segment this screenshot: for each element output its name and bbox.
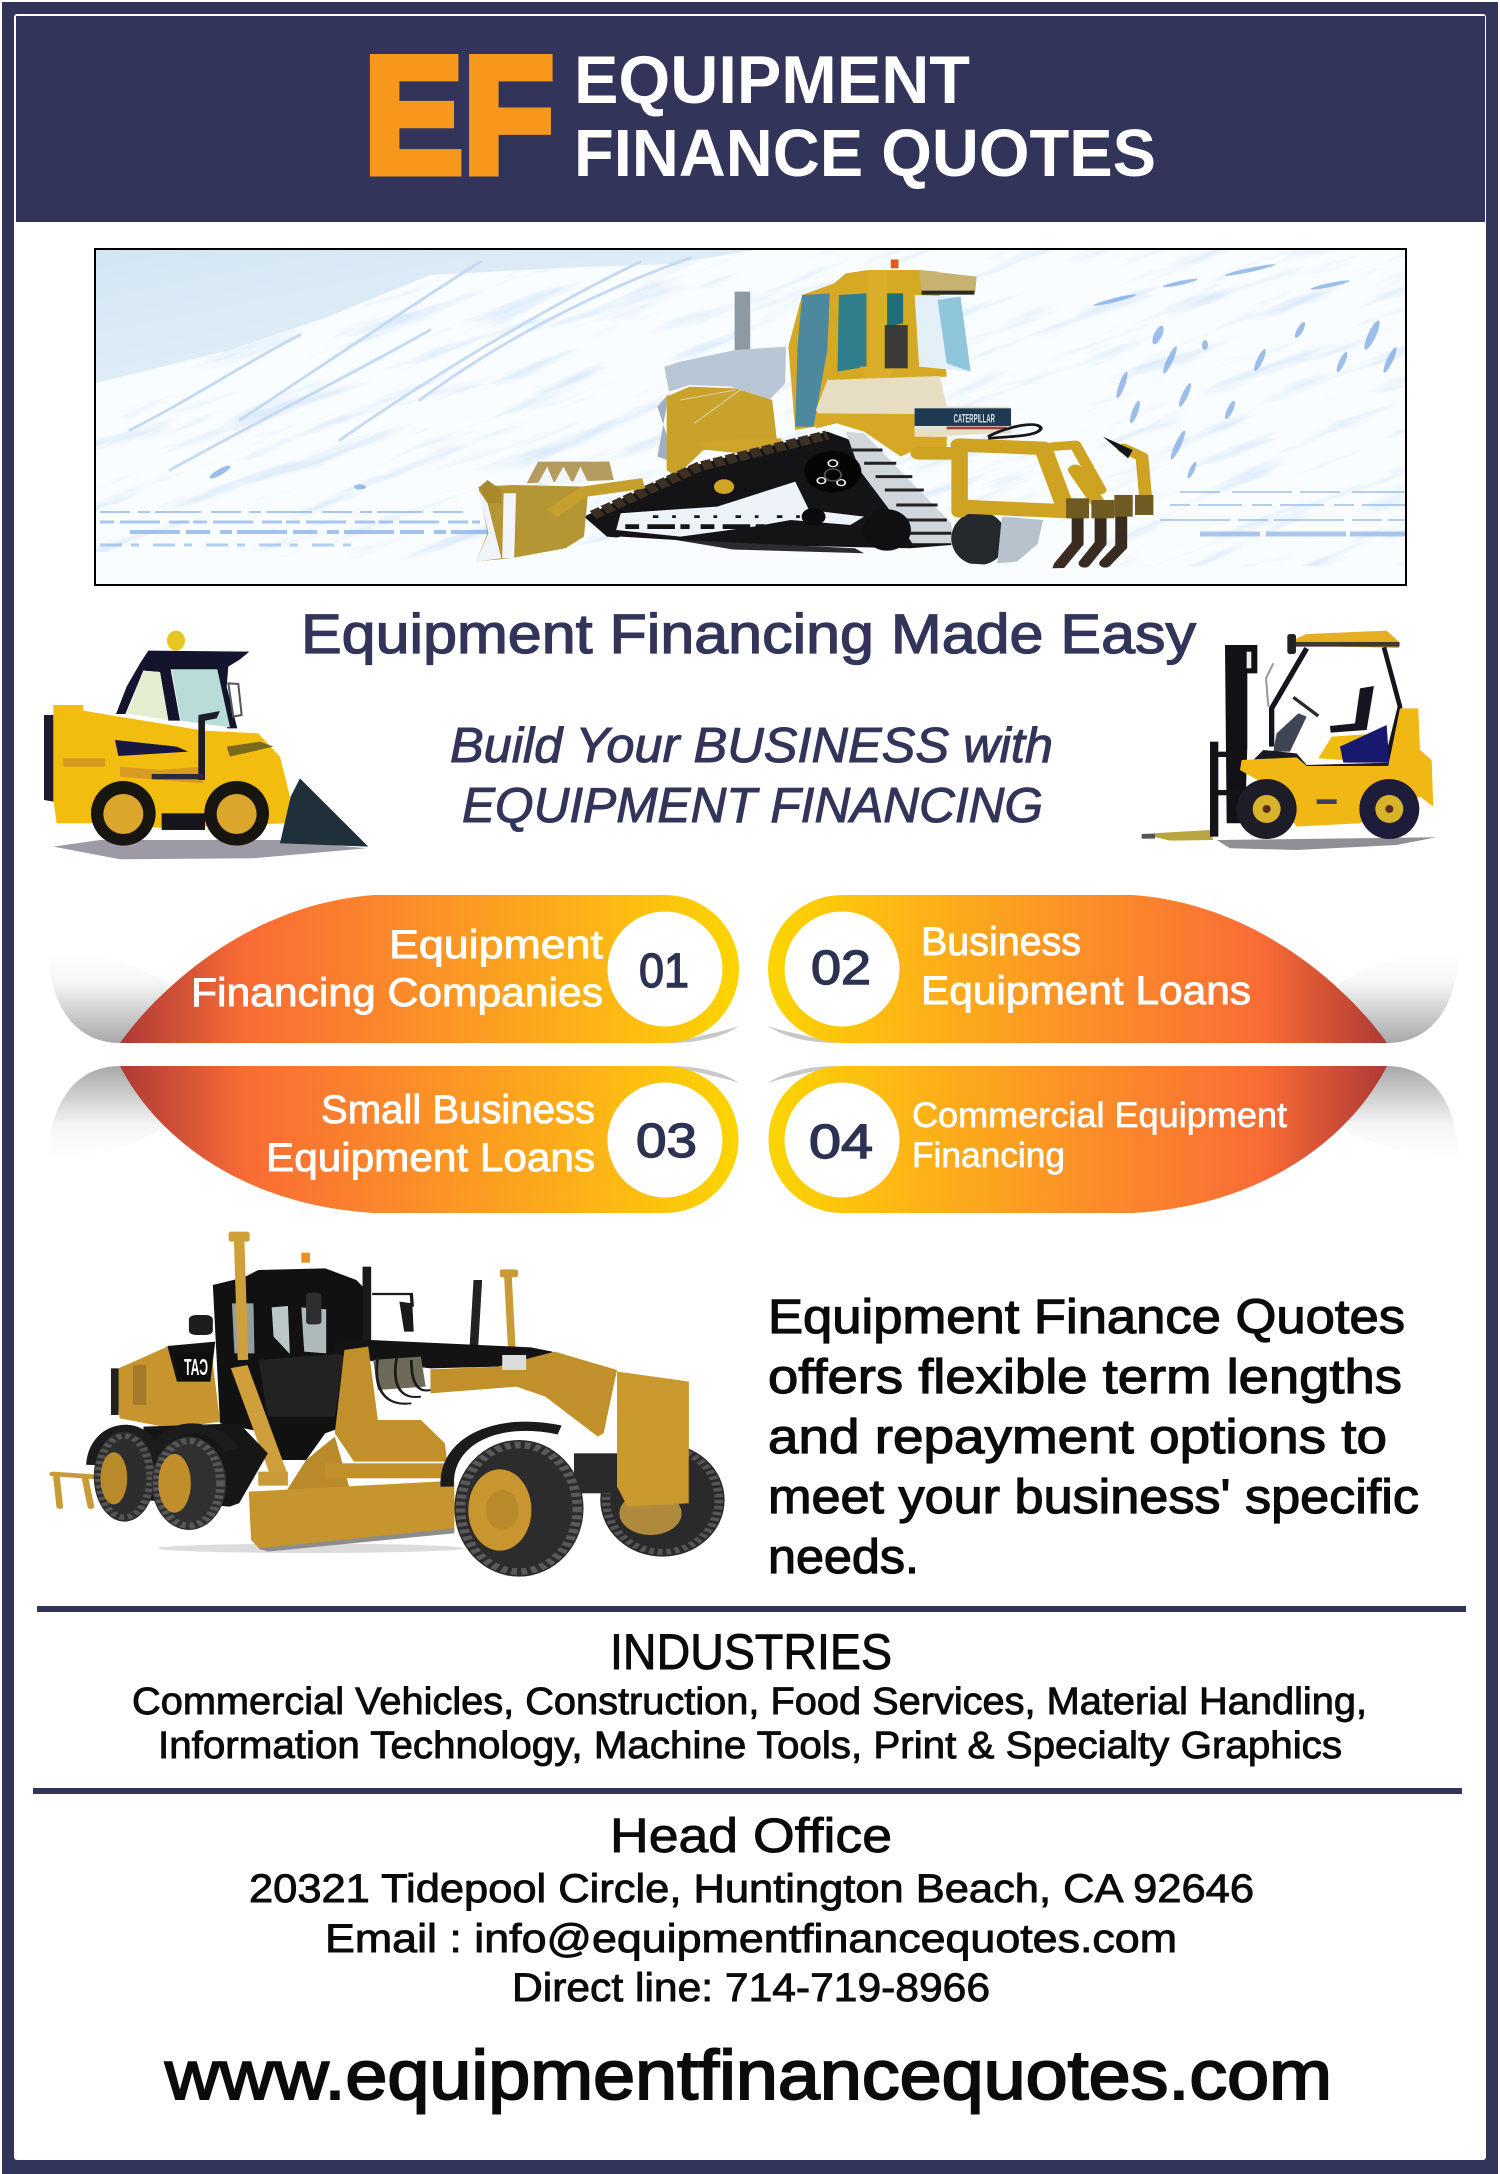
industries block: INDUSTRIES xyxy=(610,1624,892,1680)
icon: skid steer loader xyxy=(44,631,368,859)
icon: motor grader xyxy=(53,1232,725,1577)
badge 03 xyxy=(608,1082,722,1198)
logo wordmark: EQUIPMENT xyxy=(574,42,970,118)
logo wordmark xyxy=(574,42,1156,191)
industries block xyxy=(132,1624,1367,1767)
description paragraph: Equipment Finance Quotes xyxy=(768,1291,1405,1344)
ribbon 02: 02 xyxy=(811,942,871,995)
badge 01 xyxy=(608,912,722,1026)
description paragraph: needs. xyxy=(768,1531,919,1584)
ribbon 01 xyxy=(48,895,739,1043)
ribbon 03: Equipment Loans xyxy=(266,1136,595,1180)
head office block: Direct line: 714-719-8966 xyxy=(512,1966,990,2010)
head office block: Email : info@equipmentfinancequotes.com xyxy=(325,1917,1177,1961)
bulldozer drawing xyxy=(93,259,1470,585)
description paragraph xyxy=(768,1291,1419,1584)
ribbon 04: Commercial Equipment xyxy=(912,1096,1287,1135)
head office block: Head Office xyxy=(610,1810,892,1863)
logo mark: EF: EF xyxy=(364,23,554,207)
ribbon 02: Equipment Loans xyxy=(921,969,1251,1013)
heading: Equipment Financing Made Easy xyxy=(301,602,1196,665)
subheading: Build Your BUSINESS with xyxy=(450,719,1053,773)
header band xyxy=(16,16,1485,222)
ribbon 02: Business xyxy=(921,920,1081,964)
ribbon 02 xyxy=(768,895,1459,1043)
hero photo: bulldozer in snow xyxy=(94,248,1407,586)
ribbon 04 xyxy=(768,1066,1459,1213)
description paragraph: meet your business' specific xyxy=(768,1471,1419,1524)
logo wordmark: FINANCE QUOTES xyxy=(574,116,1156,191)
industries block: Information Technology, Machine Tools, Print & Specialty Graphics xyxy=(158,1725,1342,1767)
description paragraph: offers flexible term lengths xyxy=(768,1351,1402,1404)
subheading: EQUIPMENT FINANCING xyxy=(462,779,1043,833)
ribbon 03: 03 xyxy=(636,1115,697,1168)
ribbon 03: Small Business xyxy=(321,1088,595,1132)
icon: forklift xyxy=(1142,631,1437,850)
description paragraph: and repayment options to xyxy=(768,1411,1387,1464)
ribbon 01: Financing Companies xyxy=(191,971,603,1015)
icon: motor grader: CAT xyxy=(184,1355,208,1381)
industries block: Commercial Vehicles, Construction, Food Services, Material Handling, xyxy=(132,1681,1367,1723)
ribbon 04: 04 xyxy=(809,1116,873,1169)
head office block xyxy=(249,1810,1254,2010)
ribbon 01: Equipment xyxy=(389,923,603,967)
website url: www.equipmentfinancequotes.com xyxy=(164,2036,1332,2114)
subheading xyxy=(450,719,1053,833)
bulldozer drawing: CATERPILLAR xyxy=(954,413,995,426)
ribbon 04: Financing xyxy=(912,1136,1065,1175)
ribbon 03 xyxy=(48,1066,739,1213)
ribbon 01: 01 xyxy=(639,945,689,998)
head office block: 20321 Tidepool Circle, Huntington Beach, CA 92646 xyxy=(249,1867,1254,1911)
